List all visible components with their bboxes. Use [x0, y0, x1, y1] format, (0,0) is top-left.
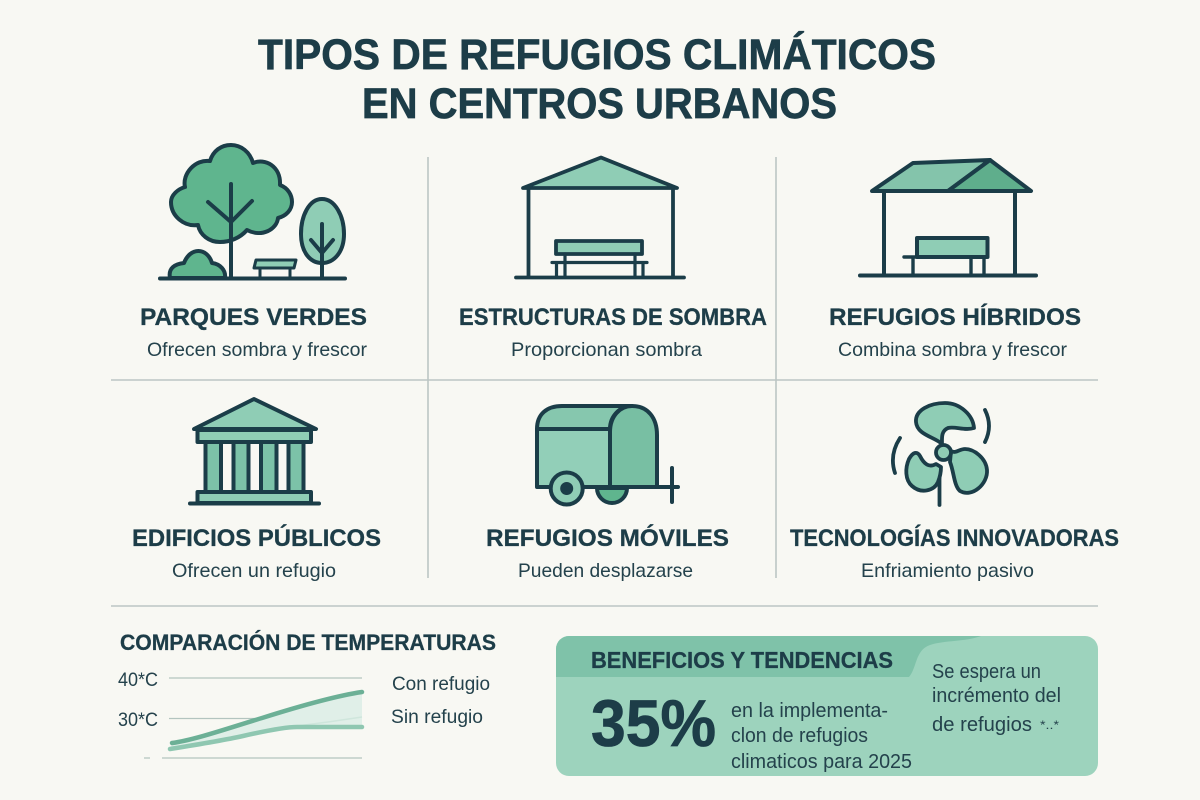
heading: edificios publicos: EDIFICIOS PÚBLICOS: [132, 524, 381, 552]
text: stat description: en la implementa-: [731, 700, 888, 722]
heading: parques verdes: PARQUES VERDES: [140, 304, 367, 331]
panel: tecnologias innovadoras: [790, 403, 1119, 582]
legend: [391, 673, 490, 728]
heading: refugios moviles: REFUGIOS MÓVILES: [486, 524, 729, 552]
heading: beneficios y tendencias: BENEFICIOS Y TENDENCIAS: [591, 647, 893, 673]
line chart: 30*C: [118, 709, 158, 731]
title: EN CENTROS URBANOS: [362, 80, 837, 128]
text: trend note: de refugios: [932, 714, 1032, 736]
panel: estructuras de sombra: [459, 158, 767, 361]
stat: 35%: 35%: [591, 686, 716, 760]
heading: tecnologias innovadoras: TECNOLOGÍAS INNOVADORAS: [790, 524, 1119, 552]
text: refugios moviles: Pueden desplazarse: [518, 560, 693, 582]
title: [258, 31, 936, 128]
icon: trees and bench: [160, 145, 345, 278]
text: edificios publicos: Ofrecen un refugio: [172, 560, 336, 582]
panel: refugios hibridos: [829, 160, 1081, 361]
text: stat description: [731, 700, 912, 773]
panel: temperature comparison: [118, 630, 496, 758]
icon: mobile trailer: [537, 406, 678, 504]
icon: fan: [893, 403, 989, 505]
heading: comparacion de temperaturas: COMPARACIÓN DE TEMPERATURAS: [120, 630, 496, 655]
panel: parques verdes: [140, 145, 368, 361]
legend: Con refugio: [392, 673, 490, 695]
panel: beneficios y tendencias: [556, 636, 1098, 776]
text: trend note: incrémento del: [932, 685, 1061, 707]
text: refugios hibridos: Combina sombra y frescor: [838, 339, 1067, 361]
icon: shade structure: [516, 158, 684, 278]
icon: hybrid shelter: [860, 160, 1036, 276]
panel: edificios publicos: [132, 399, 381, 582]
text: trend note: *..*: [1040, 718, 1059, 732]
text: estructuras de sombra: Proporcionan sombra: [511, 339, 702, 361]
panel: refugios moviles: [486, 406, 729, 582]
title: TIPOS DE REFUGIOS CLIMÁTICOS: [258, 31, 936, 79]
icon: public building: [190, 399, 319, 504]
line chart: 40*C: [118, 669, 158, 691]
heading: estructuras de sombra: ESTRUCTURAS DE SOMBRA: [459, 304, 767, 331]
text: trend note: Se espera un: [932, 661, 1041, 683]
text: tecnologias innovadoras: Enfriamiento pasivo: [861, 560, 1034, 582]
legend: Sin refugio: [391, 706, 483, 728]
heading: refugios hibridos: REFUGIOS HÍBRIDOS: [829, 303, 1081, 331]
text: trend note: [932, 661, 1061, 736]
text: stat description: climaticos para 2025: [731, 751, 912, 773]
text: stat description: clon de refugios: [731, 725, 868, 747]
line chart: [118, 669, 362, 758]
text: parques verdes: Ofrecen sombra y frescor: [147, 339, 368, 361]
